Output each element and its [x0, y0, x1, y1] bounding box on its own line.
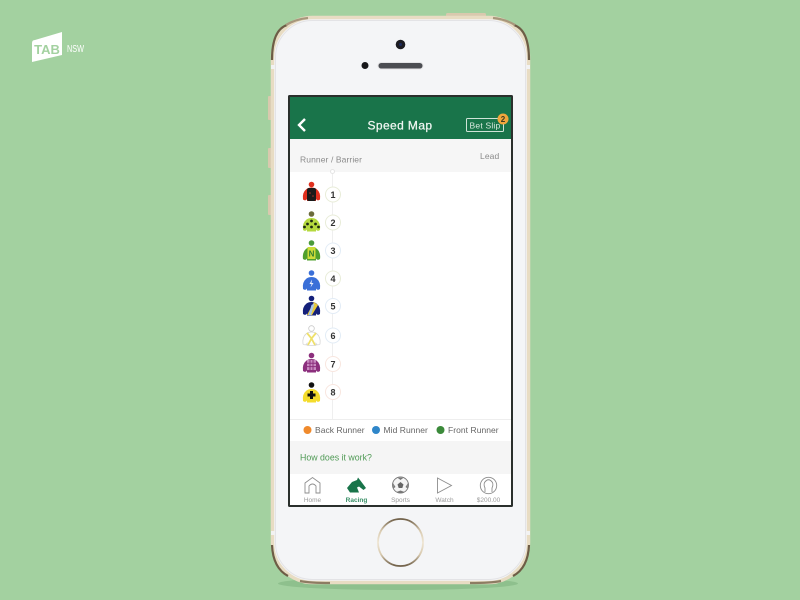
- tab bar: [304, 477, 501, 504]
- runner 4: 4: [330, 274, 336, 284]
- tab: Account balance: $200.00: [477, 497, 501, 504]
- home button: [378, 519, 423, 566]
- speaker: [378, 62, 423, 69]
- runner 7: 7: [330, 359, 336, 369]
- header bar: [290, 97, 511, 139]
- legend: Back Runner: [315, 425, 365, 435]
- button: Bet Slip: [466, 114, 508, 132]
- runner 6: [303, 326, 340, 346]
- runner 5: [303, 296, 340, 316]
- runner 3: [303, 240, 340, 260]
- tab: Racing: Racing: [346, 497, 367, 504]
- tab: Account balance: [477, 477, 501, 504]
- column header band: Lead: [480, 151, 499, 161]
- tab: Home: Home: [304, 497, 322, 504]
- tab: Racing: [346, 478, 367, 504]
- runner 2: [303, 211, 340, 232]
- runner 2: 2: [330, 218, 336, 228]
- runner 7: [303, 353, 340, 372]
- phone body: [268, 13, 530, 583]
- help link band: [290, 441, 511, 474]
- runner 5: 5: [330, 301, 336, 311]
- phone shadow: [278, 577, 518, 590]
- legend: [290, 420, 511, 435]
- runner 8: [303, 382, 340, 402]
- logo: TAB NSW: [32, 32, 84, 62]
- help link band: How does it work?: [300, 452, 372, 462]
- tab: Sports: Sports: [391, 497, 411, 504]
- runner 4: [303, 270, 340, 290]
- tab: Watch: Watch: [435, 497, 454, 504]
- runner 3: N: [309, 250, 315, 258]
- button: Bet Slip: Bet Slip: [470, 120, 501, 130]
- proximity sensor: [362, 62, 368, 69]
- legend: Front Runner: [448, 425, 499, 435]
- button: Bet Slip: 2: [501, 115, 506, 124]
- runner 1: 1: [330, 190, 336, 200]
- runner 8: 8: [330, 387, 336, 397]
- tab: Watch: [435, 478, 454, 504]
- barrier track line: [330, 170, 334, 419]
- icon: back chevron: [299, 119, 305, 131]
- heading: Speed Map: Speed Map: [368, 118, 432, 132]
- tab: Sports: [391, 477, 411, 504]
- runner 6: 6: [330, 331, 336, 341]
- screen: [288, 95, 513, 507]
- logo: TAB NSW: TAB: [34, 42, 60, 57]
- tab: Home: [304, 478, 322, 504]
- runner 3: 3: [330, 246, 336, 256]
- side buttons: [268, 13, 486, 215]
- camera: [396, 40, 405, 49]
- column header band: Runner / Barrier: [300, 154, 362, 164]
- legend: Mid Runner: [384, 425, 428, 435]
- runner 1: [303, 182, 340, 202]
- logo: TAB NSW: NSW: [67, 44, 84, 55]
- column header band: [290, 139, 511, 172]
